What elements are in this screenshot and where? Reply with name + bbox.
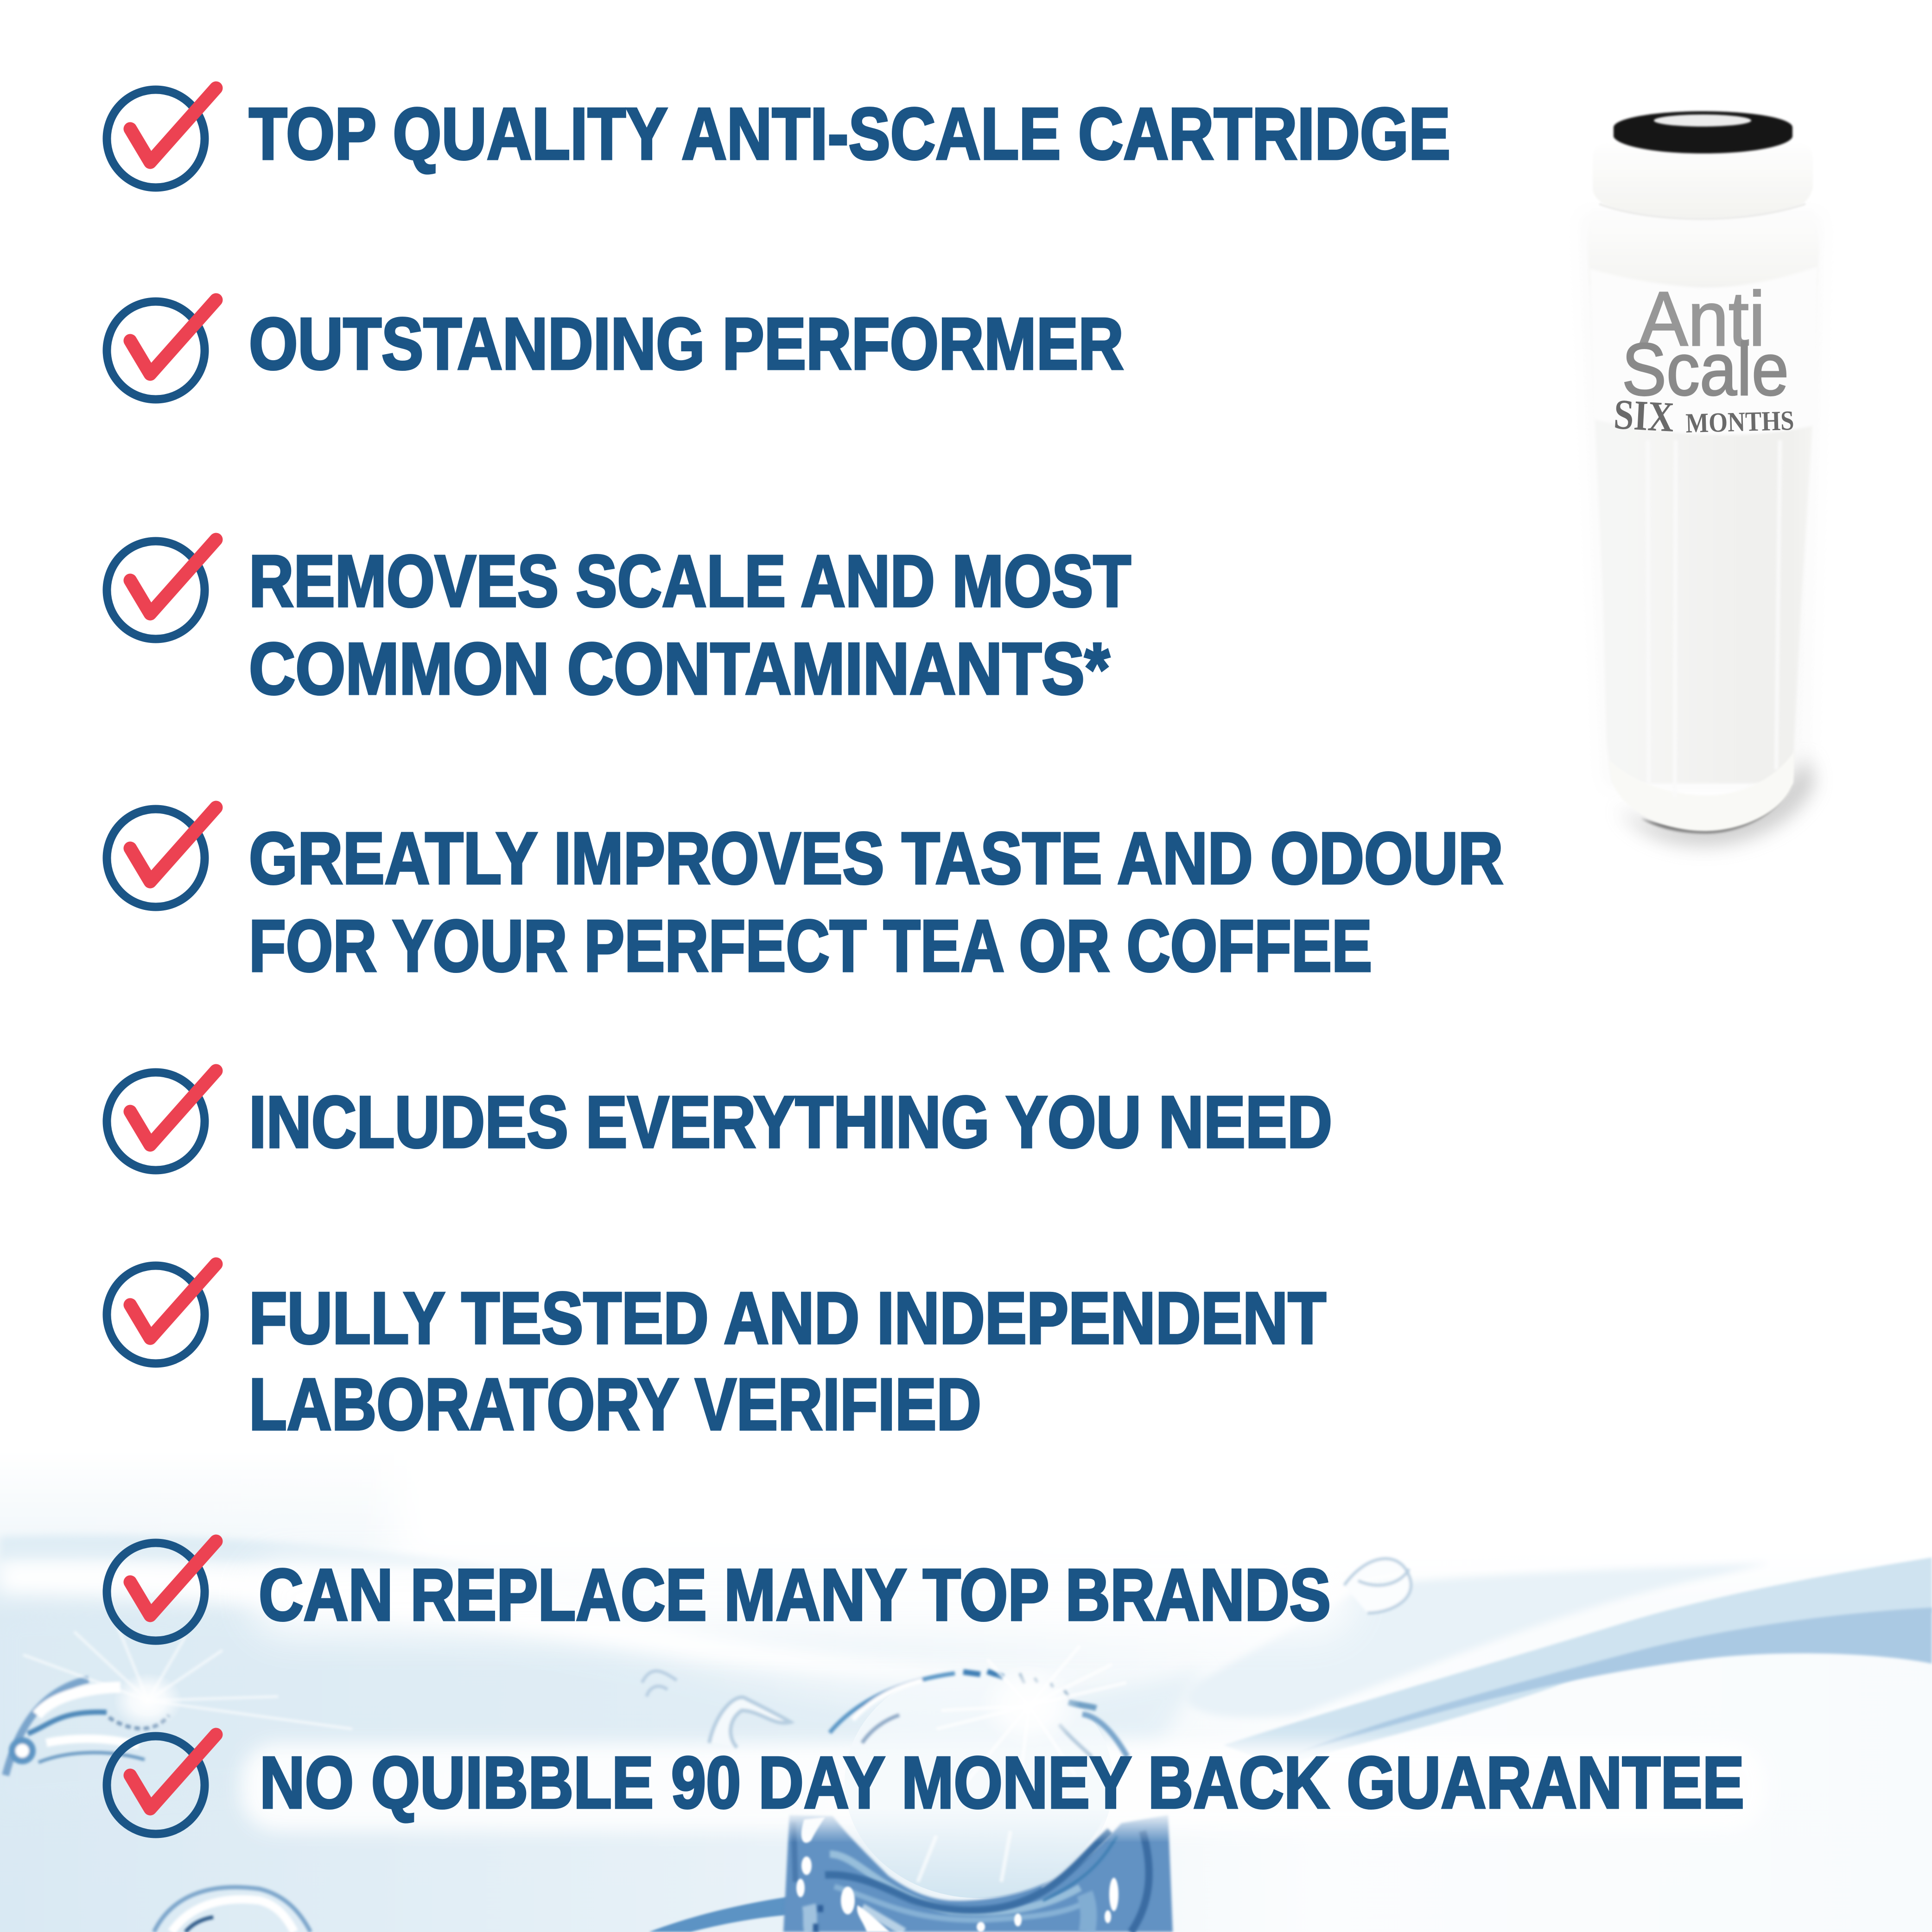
icon: check circle <box>107 300 216 400</box>
bottle body <box>1590 278 1817 783</box>
line 1: REMOVES SCALE AND MOST <box>249 540 1131 622</box>
text <box>249 818 1503 987</box>
small droplet 3 <box>1344 1559 1411 1613</box>
label <box>1590 267 1818 435</box>
left flare rays <box>23 1622 352 1729</box>
bottle shoulder <box>1588 209 1819 285</box>
bubble white specks <box>796 1817 1119 1932</box>
bottle black gasket <box>1614 111 1792 153</box>
bottle ribs <box>1648 440 1780 797</box>
bottle cap collar <box>1593 137 1813 218</box>
dark ribbon at right <box>1293 1608 1932 1754</box>
text: INCLUDES EVERYTHING YOU NEED <box>249 1081 1332 1163</box>
row 5 <box>107 1071 1332 1170</box>
base wash <box>0 1451 1932 1932</box>
pale upper wash at right <box>1187 1563 1771 1717</box>
bottle collar crease <box>1599 204 1805 219</box>
line 1: FULLY TESTED AND INDEPENDENT <box>249 1277 1326 1359</box>
label text: SIX MONTHS <box>1613 390 1794 441</box>
left flare <box>113 1673 183 1729</box>
icon: check circle <box>107 1071 216 1170</box>
icon: check circle <box>107 1735 216 1834</box>
line 1: GREATLY IMPROVES TASTE AND ODOUR <box>249 818 1503 899</box>
icon: check circle <box>107 1541 216 1641</box>
bubble lower body with fade <box>649 1815 1173 1932</box>
big bubble <box>649 1646 1173 1932</box>
row 2 <box>107 300 1124 400</box>
bubble band to left <box>649 1896 795 1932</box>
MONTHS: MONTHS <box>1685 405 1794 439</box>
bubble upper arcs <box>830 1671 1127 1757</box>
wash fading to white at right <box>0 1451 1932 1932</box>
bubble flare <box>978 1664 1080 1748</box>
icon: check circle <box>107 807 216 907</box>
row 4 <box>107 807 1503 987</box>
text: TOP QUALITY ANTI-SCALE CARTRIDGE <box>249 93 1450 175</box>
icon: check circle <box>107 540 216 639</box>
row 8 <box>107 1735 1744 1834</box>
bubble lens <box>845 1666 1113 1898</box>
text <box>249 1277 1326 1445</box>
left splash <box>6 1679 169 1775</box>
bottom-left bubble <box>154 1887 311 1932</box>
upper wash clearing to white <box>394 1418 1932 1571</box>
bubble flare rays <box>918 1646 1126 1882</box>
small droplet 1 <box>642 1671 677 1697</box>
pale top ribbon at left <box>0 1535 603 1585</box>
line 2: FOR YOUR PERFECT TEA OR COFFEE <box>249 905 1372 987</box>
text <box>249 540 1131 710</box>
bottle contact shadow <box>1641 783 1792 833</box>
bottle gasket centre <box>1654 114 1751 127</box>
bottle bottom rim <box>1609 751 1794 831</box>
label text: Scale: Scale <box>1622 328 1789 411</box>
bubble solid blue <box>783 1815 1173 1932</box>
line 2: COMMON CONTAMINANTS* <box>249 628 1110 710</box>
SIX: SIX <box>1613 390 1675 441</box>
row 3 <box>107 540 1131 710</box>
icon: check circle <box>107 1264 216 1364</box>
row 6 <box>107 1264 1326 1445</box>
white glow: row 8 <box>241 1743 1766 1831</box>
text: OUTSTANDING PERFORMER <box>249 303 1124 385</box>
text: CAN REPLACE MANY TOP BRANDS <box>259 1554 1331 1636</box>
bubble light stripes <box>801 1831 1100 1932</box>
small droplet 2 <box>709 1697 790 1748</box>
white glow: row 7 <box>250 1557 1354 1636</box>
bubble dark waves <box>794 1822 1149 1932</box>
icon: check circle <box>107 88 216 187</box>
background: water waves and bubbles <box>0 1418 1932 1932</box>
row 7 <box>107 1541 1331 1641</box>
bottle soft halo <box>1581 213 1822 788</box>
white streak at left <box>0 1562 1252 1679</box>
panel: product bottle <box>1581 111 1822 846</box>
light ribbon at right <box>1224 1557 1932 1766</box>
line 2: LABORATORY VERIFIED <box>249 1364 981 1445</box>
label text: Anti: Anti <box>1639 276 1765 362</box>
bottle ground shadow <box>1618 756 1815 846</box>
row 1 <box>107 88 1450 187</box>
mid blue swell <box>0 1614 1205 1808</box>
